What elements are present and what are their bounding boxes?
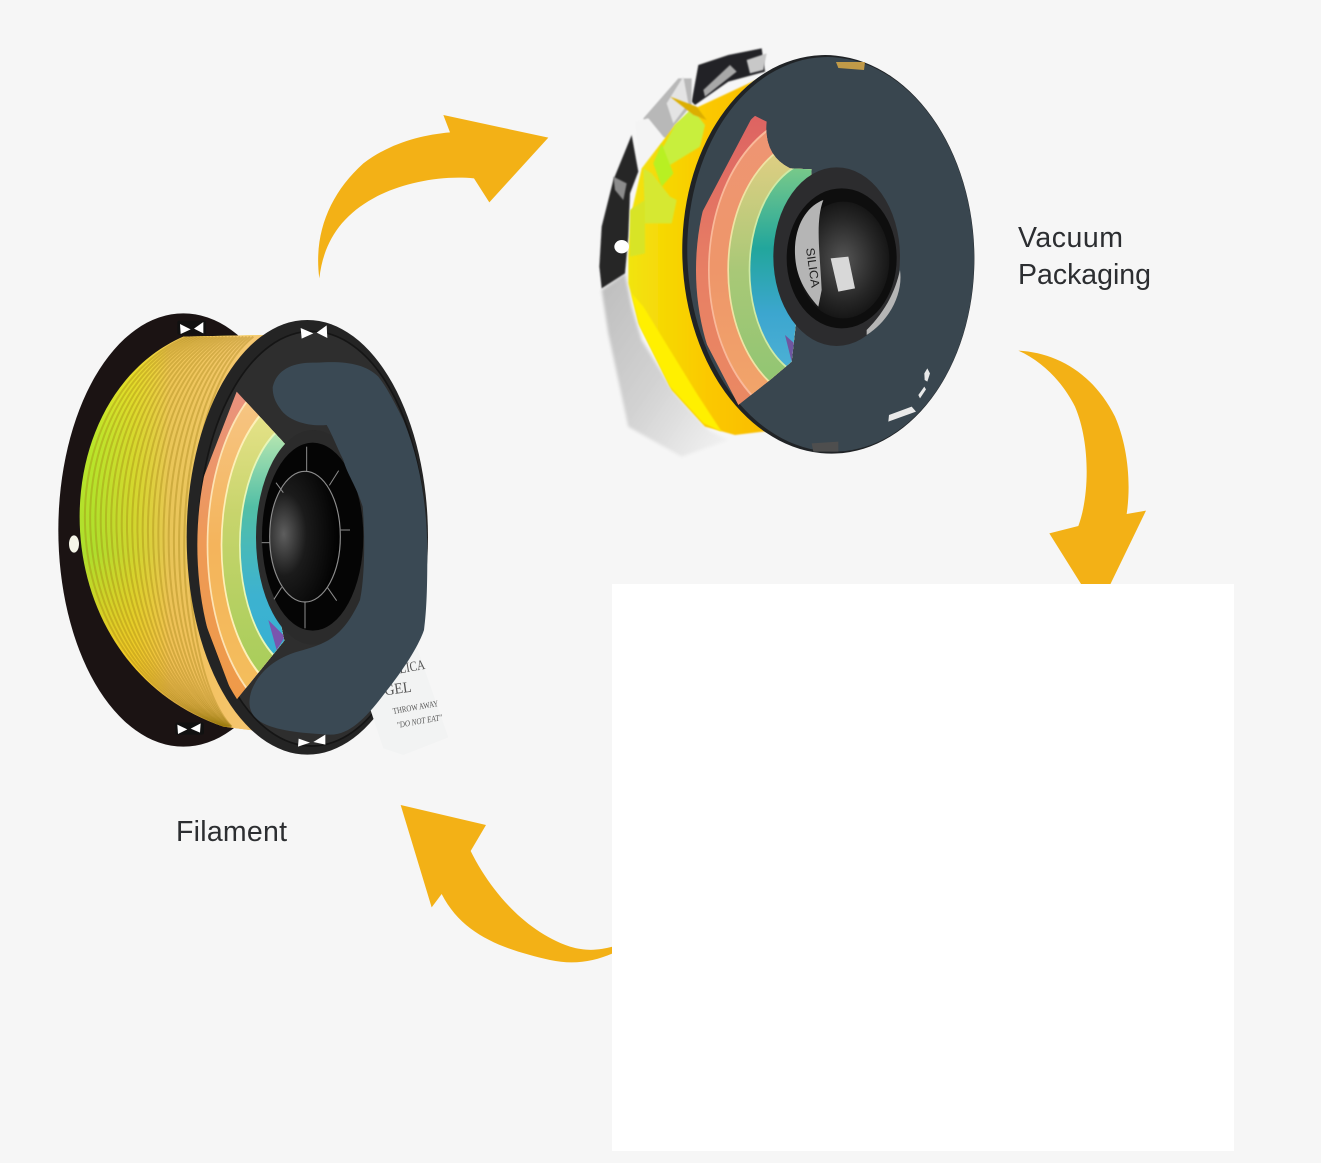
top flange notch — [836, 62, 865, 70]
blank white panel — [612, 584, 1234, 1151]
filament coil — [70, 333, 270, 733]
front flange rim — [675, 50, 981, 459]
rainbow label — [696, 116, 812, 405]
back flange notches — [69, 321, 206, 735]
silica gel packet: "DO NOT EAT" — [396, 712, 443, 730]
back flange — [58, 313, 308, 747]
silica gel packet — [368, 647, 448, 755]
arrow: filament to vacuum packaging — [318, 115, 548, 278]
green film reflections — [630, 97, 722, 432]
hub: SILICA — [803, 247, 822, 288]
back flange, top segment — [692, 48, 765, 105]
front flange face — [681, 52, 981, 457]
plastic wrap, upper — [613, 53, 767, 200]
silica gel packet: LICA — [398, 658, 426, 677]
panel: filament spool — [58, 313, 448, 755]
hub — [773, 167, 901, 346]
yellow filament under wrap — [628, 75, 807, 435]
silica gel packet: THROW AWAY — [392, 698, 440, 716]
white notch — [614, 240, 629, 253]
arrow: return to filament — [401, 805, 613, 962]
back flange, left segment — [599, 135, 638, 288]
label: vacuum packaging: Vacuum — [1018, 222, 1123, 254]
front flange notches — [298, 325, 327, 747]
silica gel packet: GEL — [383, 679, 413, 699]
label: vacuum packaging: Packaging — [1018, 259, 1151, 291]
plastic wrap, lower — [602, 273, 728, 457]
label: filament: Filament — [176, 816, 287, 848]
dark overlay patch — [249, 362, 427, 735]
flange marks — [812, 368, 930, 452]
panel: vacuum packaged spool — [599, 48, 981, 459]
hub — [256, 430, 371, 645]
rainbow label — [197, 392, 285, 699]
front flange — [187, 320, 428, 755]
arrow: vacuum packaging downward — [1018, 351, 1146, 585]
